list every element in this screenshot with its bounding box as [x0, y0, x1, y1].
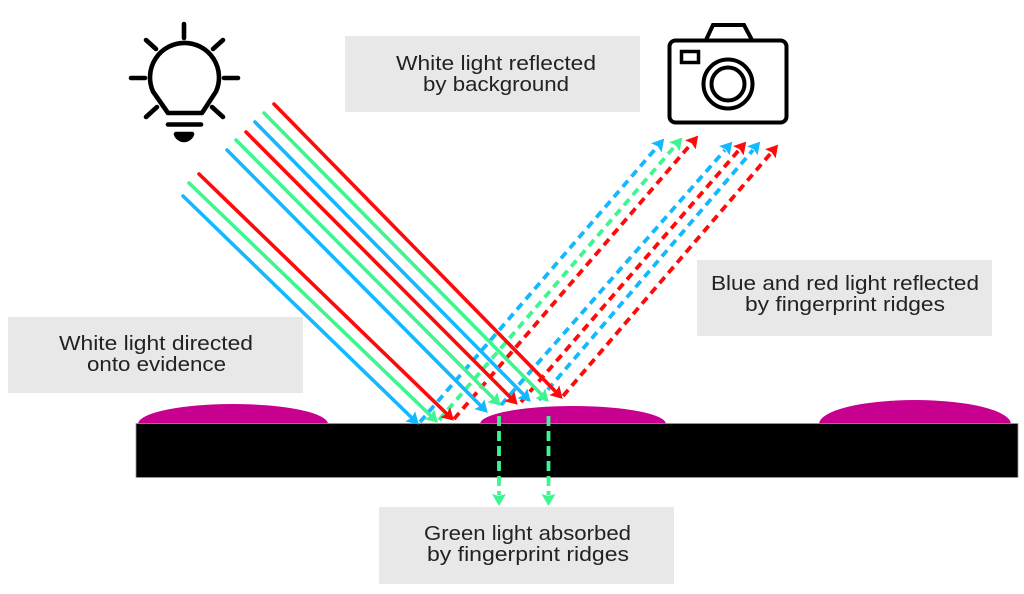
caption: white light reflected by background: White light reflected	[396, 52, 596, 75]
caption: white light directed onto evidence: White light directed	[59, 332, 253, 355]
ridge: middle fingerprint ridge	[480, 406, 666, 424]
caption: green light absorbed by fingerprint ridges	[379, 507, 674, 584]
icon: camera	[670, 25, 786, 122]
caption: white light reflected by background	[345, 36, 640, 112]
caption: white light directed onto evidence	[8, 317, 303, 393]
caption: white light directed onto evidence: onto evidence	[87, 353, 226, 376]
caption: blue and red light reflected by fingerprint ridges: by fingerprint ridges	[745, 293, 945, 316]
caption: blue and red light reflected by fingerprint ridges: Blue and red light reflected	[711, 272, 979, 295]
ridge: left fingerprint ridge	[138, 404, 328, 424]
icon: light bulb	[131, 24, 238, 140]
ridge: right fingerprint ridge	[819, 400, 1011, 424]
caption: blue and red light reflected by fingerprint ridges	[697, 260, 992, 336]
incoming white light rays (solid)	[183, 104, 555, 417]
evidence surface	[136, 424, 1018, 478]
caption: green light absorbed by fingerprint ridges: Green light absorbed	[424, 522, 631, 545]
absorbed green light arrows	[499, 416, 548, 495]
caption: green light absorbed by fingerprint ridges: by fingerprint ridges	[427, 543, 629, 566]
caption: white light reflected by background: by background	[423, 73, 569, 96]
reflected light arrows (dashed)	[420, 144, 771, 422]
